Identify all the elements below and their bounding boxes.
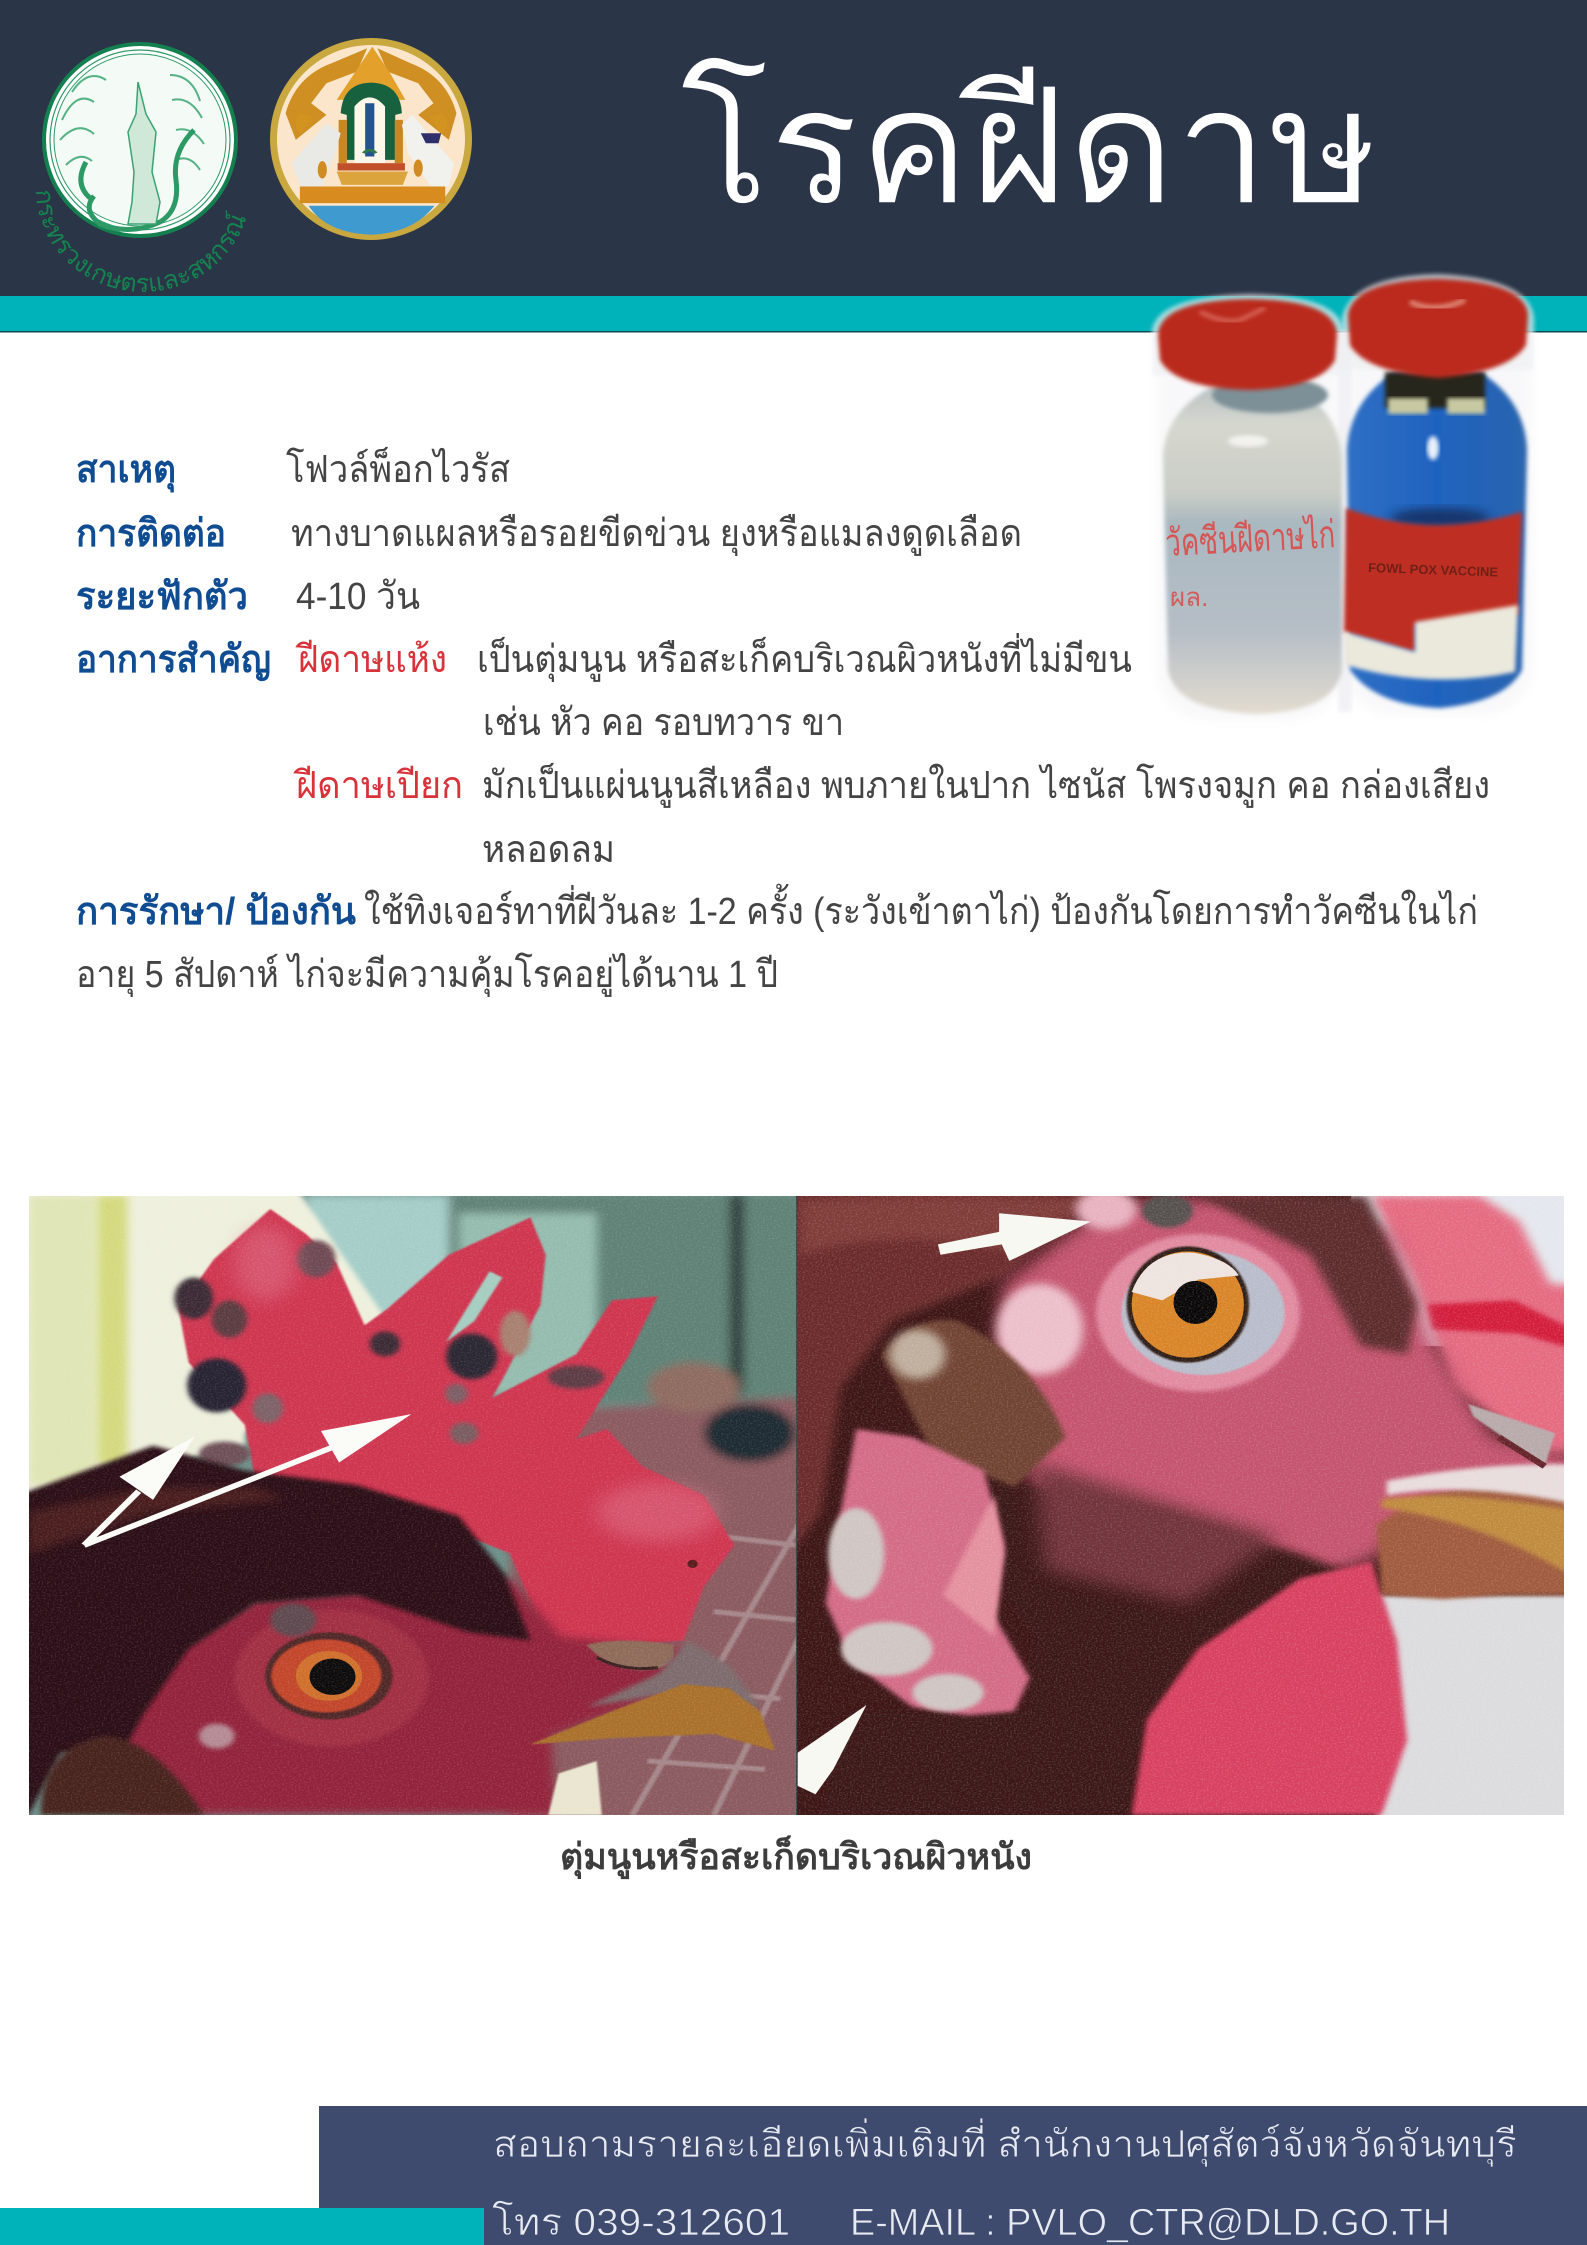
photo: chicken comb with lesions (29, 1196, 796, 1815)
brown ear tuft (882, 1320, 1065, 1487)
face (117, 1578, 683, 1815)
eye (1096, 1234, 1300, 1392)
row: symptoms wet pox: ฝีดาษเปียก (293, 765, 463, 807)
row: symptoms wet pox (293, 762, 1490, 871)
vaccine vials photo (1152, 274, 1534, 720)
row: treatment and prevention: อายุ 5 สัปดาห์ ไก่จะมีความคุ้มโรคอยู่ได้นาน 1 ปี (76, 952, 778, 997)
header band (0, 0, 1587, 332)
noise speckle (796, 1196, 1564, 1815)
title: โรคฝีดาษ (680, 57, 1378, 238)
row: symptoms dry pox: เป็นตุ่มนูน หรือสะเก็คบริเวณผิวหนังที่ไม่มีขน (477, 633, 1132, 682)
row: cause: โฟวล์พ็อกไวรัส (286, 446, 510, 491)
row: treatment and prevention (76, 883, 1478, 997)
photo: chicken head with scabs (796, 1196, 1564, 1815)
row: incubation: ระยะฟักตัว (76, 576, 248, 618)
row: transmission: ทางบาดแผลหรือรอยขีดข่วน ยุงหรือแมลงดูดเลือด (291, 513, 1022, 556)
footer text line 1: สอบถามรายละเอียดเพิ่มเติมที่ สำนักงานปศุสัตว์จังหวัดจันทบุรี (493, 2118, 1517, 2167)
row: symptoms dry pox (76, 633, 1132, 744)
footer phone: โทร 039-312601 (492, 2200, 790, 2244)
left vial (1158, 299, 1342, 714)
row: symptoms dry pox: ฝีดาษแห้ง (295, 639, 447, 681)
eye (235, 1610, 428, 1746)
row: incubation (76, 576, 420, 618)
row: cause: สาเหตุ (76, 449, 176, 493)
logo: provincial livestock seal (270, 38, 472, 240)
footer contact panel (0, 2106, 1587, 2245)
white arrows (84, 1414, 411, 1545)
row: symptoms wet pox: มักเป็นแผ่นนูนสีเหลือง พบภายในปาก ไซนัส โพรงจมูก คอ กล่องเสียง (482, 762, 1490, 808)
info block (76, 446, 1490, 997)
logo: ministry of agriculture seal (36, 42, 246, 292)
red comb right (1371, 1195, 1587, 1454)
noise speckle (29, 1196, 796, 1815)
row: symptoms wet pox: หลอดลม (482, 829, 615, 871)
comb (178, 1209, 734, 1649)
row: symptoms dry pox: เช่น หัว คอ รอบทวาร ขา (483, 702, 844, 744)
footer email: E-MAIL : PVLO_CTR@DLD.GO.TH (850, 2202, 1450, 2244)
row: transmission: การติดต่อ (76, 513, 226, 555)
wattle (1132, 1562, 1407, 1815)
white arrows (798, 1213, 1091, 1794)
vial label vaccine name: FOWL POX VACCINE (1368, 560, 1499, 580)
beak (586, 1641, 760, 1707)
row: transmission (76, 513, 1022, 556)
nostril dot (687, 1560, 698, 1568)
row: symptoms dry pox: อาการสำคัญ (76, 639, 271, 681)
caption: ตุ่มนูนหรือสะเก็ดบริเวณผิวหนัง (560, 1834, 1032, 1880)
ministry name on arc: กระทรวงเกษตรและสหกรณ์ (36, 190, 246, 292)
row: incubation: 4-10 วัน (296, 576, 420, 618)
neck feathers (1021, 1482, 1345, 1603)
vial volume text: ผล. (1170, 582, 1208, 612)
row: treatment and prevention: ใช้ทิงเจอร์ทาที่ฝีวันละ 1-2 ครั้ง (ระวังเข้าตาไก่) ป้องกันโดยการทำวัคซีนในไก่ (364, 883, 1478, 933)
earlobe (826, 1429, 1030, 1715)
feathers (0, 1446, 530, 1815)
vial label text: วัคซีนฝีดาษไก่ (1164, 513, 1336, 565)
row: cause (76, 446, 510, 493)
right vial (1344, 279, 1528, 708)
row: treatment and prevention: การรักษา/ ป้องกัน (76, 891, 356, 933)
beak and nostril (1374, 1488, 1564, 1602)
face (994, 1195, 1587, 1595)
